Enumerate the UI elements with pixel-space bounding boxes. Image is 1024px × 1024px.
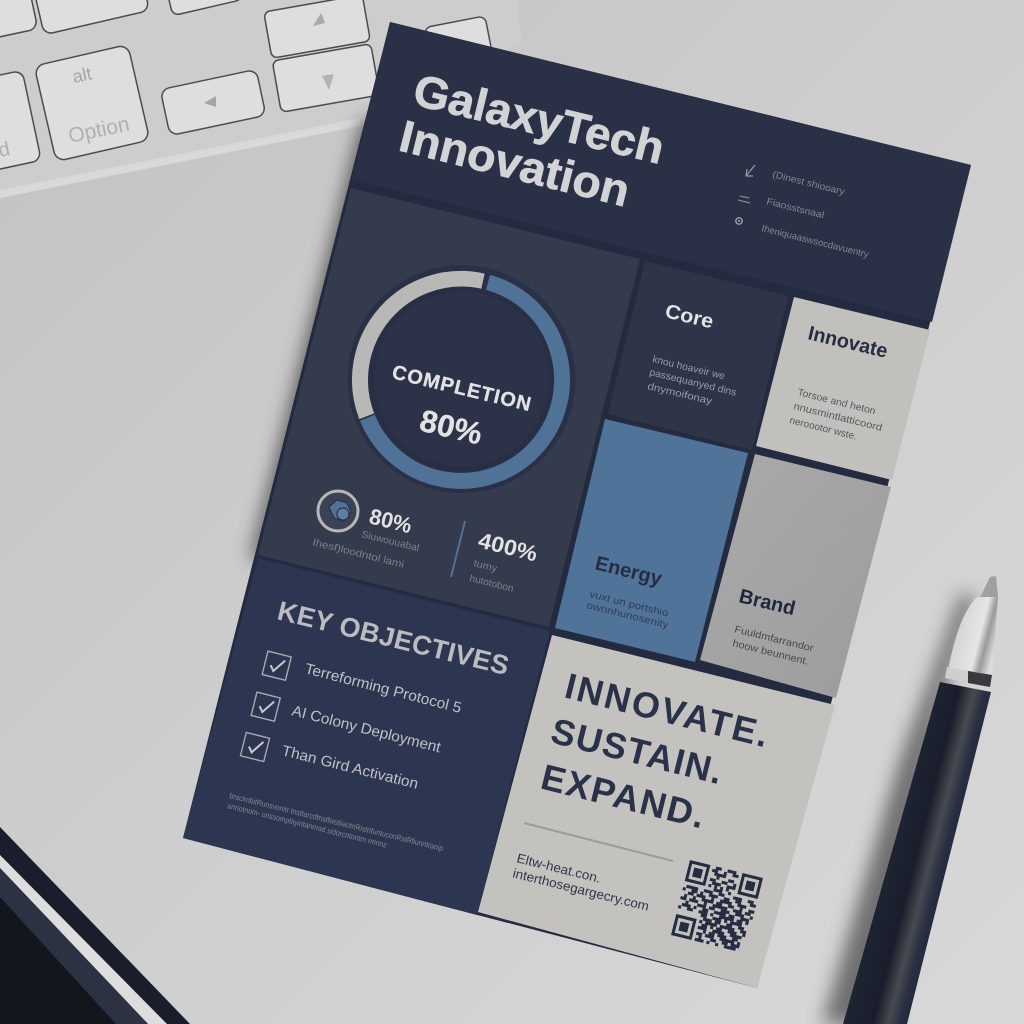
- stat: 400%: tumy: [472, 558, 498, 575]
- donut label: [390, 361, 533, 452]
- slogan: INNOVATE.: [561, 665, 773, 755]
- donut chart: [348, 265, 576, 493]
- icon: stat badge: [318, 491, 358, 531]
- objective: grid: Than Gird Activation: [280, 742, 420, 793]
- card base: [183, 22, 971, 988]
- panel: header: [352, 22, 971, 322]
- slogan: [537, 665, 773, 836]
- donut label: 80%: [416, 403, 486, 452]
- objectives fine print: bracknbitRunsvonitr tnsttarcdtnstfwstiiaotnRistnfuntuconRstRfiunntranip: [229, 791, 445, 853]
- panel: innovate: nnusmintlatticoord: [792, 401, 883, 434]
- card shadow: [250, 120, 395, 560]
- stat divider: [451, 521, 465, 577]
- stat: 80%: Ihesf)loodntol lami: [311, 537, 405, 571]
- panel: brand: [700, 454, 891, 698]
- header contact list: Iheniquaaswsocdavuentry: [760, 223, 870, 261]
- pen shadow: [822, 592, 975, 1024]
- stat: 400%: 400%: [476, 528, 540, 566]
- panel: energy: Energy: [593, 553, 665, 591]
- stat: 400%: hutotobon: [468, 573, 515, 595]
- panel: energy: vuxt un portshio: [588, 589, 670, 620]
- panel: core: knou hoaveir we: [651, 354, 726, 382]
- qr code: [671, 862, 763, 952]
- title: GalaxyTech: [409, 64, 669, 174]
- stat: 80%: Siuwouuabal: [360, 529, 420, 554]
- stat: 400%: [468, 528, 540, 595]
- objective: colony: [251, 692, 443, 757]
- panel: innovate: [756, 297, 930, 480]
- pen: [843, 576, 998, 1024]
- contact text: Eltw-heat.con.: [515, 850, 602, 886]
- panel: core: passequanyed dins: [648, 367, 737, 399]
- slogan: EXPAND.: [537, 756, 709, 836]
- stat: 80%: [311, 504, 420, 571]
- keyboard: Option: [66, 113, 132, 148]
- panel: innovate: Torsoe and heton: [796, 387, 877, 417]
- header contact list: (Dinest shiooary: [771, 169, 846, 198]
- objective: grid: [240, 732, 420, 793]
- slogan: SUSTAIN.: [547, 710, 727, 792]
- header contact list: Fiaosstsnaal: [765, 196, 825, 221]
- panel: completion: [258, 188, 640, 627]
- panel: brand: Brand: [737, 585, 797, 620]
- keyboard: [0, 0, 522, 198]
- panel: key objectives: [183, 558, 550, 915]
- slogan divider: [524, 823, 673, 861]
- donut label: COMPLETION: [390, 361, 533, 416]
- keyboard: alt: [71, 63, 93, 87]
- objective: terraforming: [262, 651, 463, 717]
- contact text: interthosegargecry.com: [511, 865, 651, 914]
- panel: energy: ownnhunosenity: [585, 600, 669, 631]
- stat: 80%: 80%: [367, 504, 415, 538]
- header contact list: [736, 165, 870, 261]
- objective: terraforming: Terreforming Protocol 5: [303, 660, 463, 717]
- objectives heading: KEY OBJECTIVES: [275, 596, 512, 681]
- panel: innovate: neroootor wste.: [788, 415, 858, 443]
- panel: innovate: Innovate: [806, 322, 890, 363]
- title: [395, 64, 669, 217]
- flyer card: [183, 22, 971, 988]
- panel: core: [608, 261, 788, 450]
- panel: brand: Fuuldmfarrandor: [733, 624, 815, 655]
- panel: core: Core: [663, 300, 716, 333]
- objectives fine print: anriotnom- unssomptiiyiritanmod sidorcntontm rmnnz: [227, 801, 388, 850]
- phone corner: [0, 827, 190, 1024]
- title: Innovation: [395, 110, 635, 217]
- panel: brand: hoow beunnent.: [731, 638, 810, 668]
- panel: call to action: [478, 635, 835, 988]
- panel: energy: [555, 419, 748, 662]
- objective: colony: AI Colony Deployment: [290, 702, 443, 757]
- panel: core: dnymoifonay: [646, 381, 713, 407]
